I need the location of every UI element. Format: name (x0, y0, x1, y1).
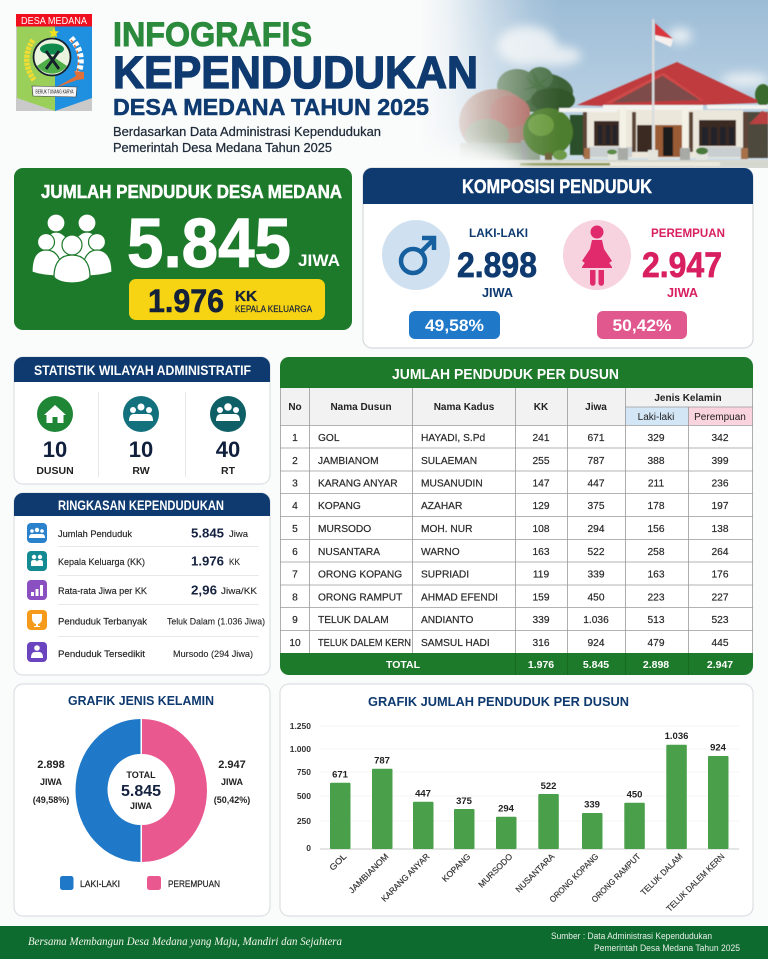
row 5: MOH. NUR (421, 524, 472, 535)
y axis labels: 750 (297, 767, 311, 777)
table header: KK (534, 402, 549, 413)
subtitle: desa medana: DESA MEDANA TAHUN 2025 (113, 94, 429, 120)
row: rata-rata jiwa per kk: Rata-rata Jiwa per KK (58, 585, 148, 596)
row 2: 2 (292, 456, 298, 467)
footer (0, 926, 768, 959)
row 5 (292, 524, 729, 535)
footer source (551, 931, 740, 953)
row 9: 1.036 (583, 615, 609, 626)
row 8 (292, 592, 729, 604)
data source description: Berdasarkan Data Administrasi Kependudukan (113, 124, 381, 139)
label: laki-laki: JIWA (40, 777, 62, 787)
value labels: 787 (374, 756, 390, 766)
row 1: 329 (648, 433, 665, 444)
row: penduduk tersedikit: Penduduk Tersedikit (58, 648, 145, 659)
row 8: 159 (532, 592, 550, 604)
row 3: 447 (588, 478, 605, 490)
row 4: 197 (712, 501, 729, 512)
stat: rt (210, 396, 246, 477)
badge: female percent (597, 311, 687, 339)
row 8: AHMAD EFENDI (421, 592, 498, 604)
badge: male percent: 49,58% (425, 316, 484, 335)
row 8: 223 (648, 592, 665, 604)
icon: female figure (563, 220, 631, 290)
stat: dusun: DUSUN (36, 465, 74, 477)
label: perempuan: JIWA (221, 777, 243, 787)
y axis labels: 0 (306, 843, 311, 853)
heading: JUMLAH PENDUDUK PER DUSUN (392, 366, 619, 383)
row 1: 241 (532, 433, 550, 444)
value labels: 294 (498, 804, 515, 814)
stat: rt: RT (221, 465, 236, 477)
row 3: KARANG ANYAR (318, 478, 398, 490)
footer slogan: Bersama Membangun Desa Medana yang Maju, Mandiri dan Sejahtera (28, 934, 342, 948)
icon: male symbol (382, 220, 450, 290)
row 6: 258 (648, 547, 665, 558)
total row: 1.976 (528, 659, 554, 671)
y axis labels: 500 (297, 791, 311, 801)
row 4: 129 (532, 501, 550, 512)
row 6: 6 (292, 547, 298, 558)
label: laki-laki: (49,58%) (33, 795, 69, 805)
x axis labels: TELUK DALEM KERN (664, 851, 726, 914)
row 7: ORONG KOPANG (318, 570, 402, 580)
row 9: 9 (292, 615, 298, 626)
stat: dusun (36, 396, 74, 477)
value labels: 1.036 (665, 731, 688, 742)
row 7: 176 (712, 570, 729, 580)
row 8: 8 (292, 592, 298, 604)
row 10: 445 (712, 638, 729, 649)
row 7: 339 (588, 570, 605, 580)
total row: 5.845 (583, 659, 609, 671)
table header: No (288, 402, 302, 413)
row 6: 522 (588, 547, 605, 558)
row: penduduk terbanyak: Penduduk Terbanyak (58, 616, 147, 626)
row 9: 513 (648, 615, 665, 626)
row 10: SAMSUL HADI (421, 638, 490, 649)
panel: grafik jenis kelamin (14, 684, 270, 916)
label: perempuan (214, 759, 250, 805)
bar chart (290, 721, 739, 914)
total row (280, 653, 753, 675)
title: kependudukan: KEPENDUDUKAN (113, 47, 478, 98)
data source description: Pemerintah Desa Medana Tahun 2025 (113, 140, 332, 155)
x axis labels: TELUK DALAM (638, 851, 684, 897)
y axis labels (290, 721, 311, 853)
y axis labels: 1.250 (290, 721, 311, 731)
value labels: 339 (584, 800, 600, 810)
row 6 (292, 547, 729, 558)
title block (113, 16, 478, 155)
male statistics: LAKI-LAKI (469, 226, 528, 240)
legend: LAKI-LAKI (80, 879, 120, 889)
table header (280, 388, 753, 425)
stat: rt: 40 (216, 437, 240, 462)
row 7 (292, 570, 729, 580)
badge: female percent: 50,42% (612, 316, 672, 335)
panel: tabel jumlah penduduk per dusun (280, 357, 753, 675)
x axis labels: KOPANG (440, 851, 472, 884)
total row: 2.898 (643, 659, 669, 671)
table header: Nama Dusun (330, 402, 392, 413)
x axis labels: GOL (327, 851, 349, 873)
panel: statistik wilayah administratif (14, 357, 270, 484)
row 8: 227 (712, 592, 729, 604)
panel: komposisi penduduk (363, 168, 753, 348)
x axis labels: ORONG KOPANG (547, 851, 600, 904)
y axis labels: 1.000 (290, 744, 311, 754)
female statistics: JIWA (667, 285, 699, 300)
x axis labels: KARANG ANYAR (379, 851, 431, 904)
row 5: 138 (712, 524, 729, 535)
row 7: 119 (533, 570, 549, 580)
row 1: 1 (292, 433, 298, 444)
row: kepala keluarga: Kepala Keluarga (KK) (58, 556, 145, 567)
row 7: 7 (292, 570, 298, 580)
badge: male percent (409, 311, 500, 339)
row 6: 264 (712, 547, 729, 558)
row 2: 255 (532, 456, 550, 467)
panel: ringkasan kependudukan (14, 493, 270, 675)
row 2 (292, 456, 729, 467)
footer source: Pemerintah Desa Medana Tahun 2025 (594, 943, 740, 953)
row 1: HAYADI, S.Pd (421, 433, 485, 444)
row 8: 450 (588, 592, 605, 604)
logo: Desa Medana crest: DESA MEDANA (21, 15, 87, 27)
row 4 (292, 501, 729, 512)
stat: dusun: 10 (43, 437, 67, 462)
label: perempuan: 2.947 (218, 759, 246, 771)
label: perempuan: (50,42%) (214, 795, 250, 805)
row: rata-rata jiwa per kk (27, 580, 257, 600)
panel: jumlah penduduk (14, 168, 352, 330)
y axis labels: 250 (297, 816, 311, 826)
row 2: SULAEMAN (421, 456, 477, 467)
heading: RINGKASAN KEPENDUDUKAN (58, 498, 224, 513)
x axis labels: NUSANTARA (513, 851, 557, 894)
table header: Perempuan (694, 412, 746, 423)
row: penduduk terbanyak: Teluk Dalam (1.036 Jiwa) (167, 616, 265, 626)
row 1: 342 (712, 433, 729, 444)
table header: Nama Kadus (434, 402, 495, 413)
heading: JUMLAH PENDUDUK DESA MEDANA (41, 182, 342, 202)
row 10: 479 (648, 638, 665, 649)
donut chart: JIWA (130, 801, 152, 811)
heading: KOMPOSISI PENDUDUK (462, 177, 652, 198)
row 5: 5 (292, 524, 298, 535)
footer source: Sumber : Data Administrasi Kependudukan (551, 931, 712, 941)
row: jumlah penduduk: Jiwa (229, 529, 248, 539)
table header: Jenis Kelamin (654, 393, 722, 404)
unit: jiwa: JIWA (298, 251, 340, 270)
bars (330, 745, 728, 849)
donut chart: TOTAL (126, 770, 156, 780)
row: rata-rata jiwa per kk: 2,96 (191, 582, 217, 598)
value labels: 450 (627, 790, 642, 800)
row 7: SUPRIADI (421, 570, 469, 580)
heading: STATISTIK WILAYAH ADMINISTRATIF (34, 363, 251, 378)
row: jumlah penduduk (27, 523, 248, 543)
row 3: 236 (712, 478, 729, 490)
value labels: 375 (456, 796, 473, 807)
row 4: 4 (292, 501, 298, 512)
row 9: 339 (532, 615, 550, 626)
stat: rw (123, 396, 159, 477)
row 9: TELUK DALAM (318, 615, 389, 626)
row 1: 671 (588, 433, 605, 444)
legend: PEREMPUAN (168, 879, 220, 889)
stat: rw: 10 (129, 437, 153, 462)
logo: Desa Medana crest: BERUK TUNANG KARYA (36, 90, 74, 96)
row: kepala keluarga: 1.976 (191, 554, 224, 568)
row 8: ORONG RAMPUT (318, 592, 402, 604)
row 5: 294 (588, 524, 605, 535)
x axis labels: MURSODO (476, 851, 515, 890)
icon: people group (32, 214, 112, 283)
x axis labels: ORONG RAMPUT (589, 851, 642, 904)
badge: kepala keluarga: KEPALA KELUARGA (235, 304, 313, 315)
female statistics (642, 226, 725, 300)
row 6: 163 (532, 547, 550, 558)
heading: GRAFIK JENIS KELAMIN (68, 694, 214, 708)
row 7: 163 (648, 570, 665, 580)
panel: grafik jumlah penduduk per dusun (280, 684, 753, 916)
row 3: MUSANUDIN (421, 478, 483, 490)
badge: kepala keluarga: 1.976 (148, 283, 224, 319)
total row: 2.947 (707, 659, 733, 671)
row 5: 156 (648, 524, 665, 535)
row 2: JAMBIANOM (318, 456, 379, 467)
value labels: 671 (332, 770, 349, 780)
row 3: 211 (648, 478, 664, 490)
row 10: 924 (588, 638, 605, 649)
row 6: WARNO (421, 547, 460, 558)
female statistics: PEREMPUAN (651, 226, 725, 240)
total row: TOTAL (386, 659, 421, 671)
badge: kepala keluarga (129, 279, 325, 320)
row 3: 3 (292, 478, 298, 490)
row 10 (289, 638, 729, 649)
badge: kepala keluarga: KK (235, 288, 257, 305)
logo: Desa Medana crest (16, 14, 92, 111)
row 9: 523 (712, 615, 729, 626)
header photo: village office building (436, 0, 768, 168)
row 10: 10 (289, 638, 301, 649)
total population figure: 5.845 (127, 204, 291, 282)
row 5: 108 (532, 524, 550, 535)
row 4: 178 (648, 501, 665, 512)
donut chart (75, 719, 207, 862)
donut chart: 5.845 (121, 783, 161, 800)
row 9 (292, 615, 729, 626)
row 9: ANDIANTO (421, 615, 474, 626)
row 1: GOL (318, 433, 340, 444)
male statistics: JIWA (482, 285, 514, 300)
value labels (332, 731, 727, 814)
stat: rw: RW (132, 465, 150, 477)
value labels: 924 (710, 742, 727, 754)
row: kepala keluarga: KK (229, 557, 240, 567)
legend (60, 876, 220, 890)
row: jumlah penduduk: 5.845 (191, 526, 224, 540)
row 1 (292, 433, 729, 444)
row 10: 316 (532, 638, 550, 649)
row 4: KOPANG (318, 501, 361, 512)
title: infografis: INFOGRAFIS (113, 16, 312, 54)
row: jumlah penduduk: Jumlah Penduduk (58, 528, 132, 539)
value labels: 522 (541, 781, 556, 792)
male statistics (457, 226, 537, 300)
row 2: 399 (712, 456, 729, 467)
row 3 (292, 478, 729, 490)
row 4: AZAHAR (421, 501, 462, 512)
row: kepala keluarga (27, 551, 240, 571)
data source description (113, 124, 381, 155)
row: rata-rata jiwa per kk: Jiwa/KK (221, 586, 257, 596)
row 2: 388 (648, 456, 665, 467)
female statistics: 2.947 (642, 246, 722, 285)
value labels: 447 (415, 788, 431, 800)
row 10: TELUK DALEM KERN (318, 638, 411, 649)
row: penduduk tersedikit (27, 642, 253, 662)
row 2: 787 (588, 456, 605, 467)
male statistics: 2.898 (457, 246, 537, 285)
x axis labels: JAMBIANOM (347, 851, 390, 895)
row 4: 375 (588, 501, 605, 512)
table header: Laki-laki (638, 412, 674, 423)
row: penduduk terbanyak (27, 610, 265, 630)
row 6: NUSANTARA (318, 547, 380, 558)
label: laki-laki: 2.898 (37, 759, 65, 771)
label: laki-laki (33, 759, 69, 805)
table header: Jiwa (585, 402, 607, 413)
row: penduduk tersedikit: Mursodo (294 Jiwa) (173, 649, 253, 659)
row 5: MURSODO (318, 524, 371, 535)
x axis labels (327, 851, 726, 914)
row 3: 147 (532, 478, 550, 490)
heading: GRAFIK JUMLAH PENDUDUK PER DUSUN (368, 694, 629, 709)
